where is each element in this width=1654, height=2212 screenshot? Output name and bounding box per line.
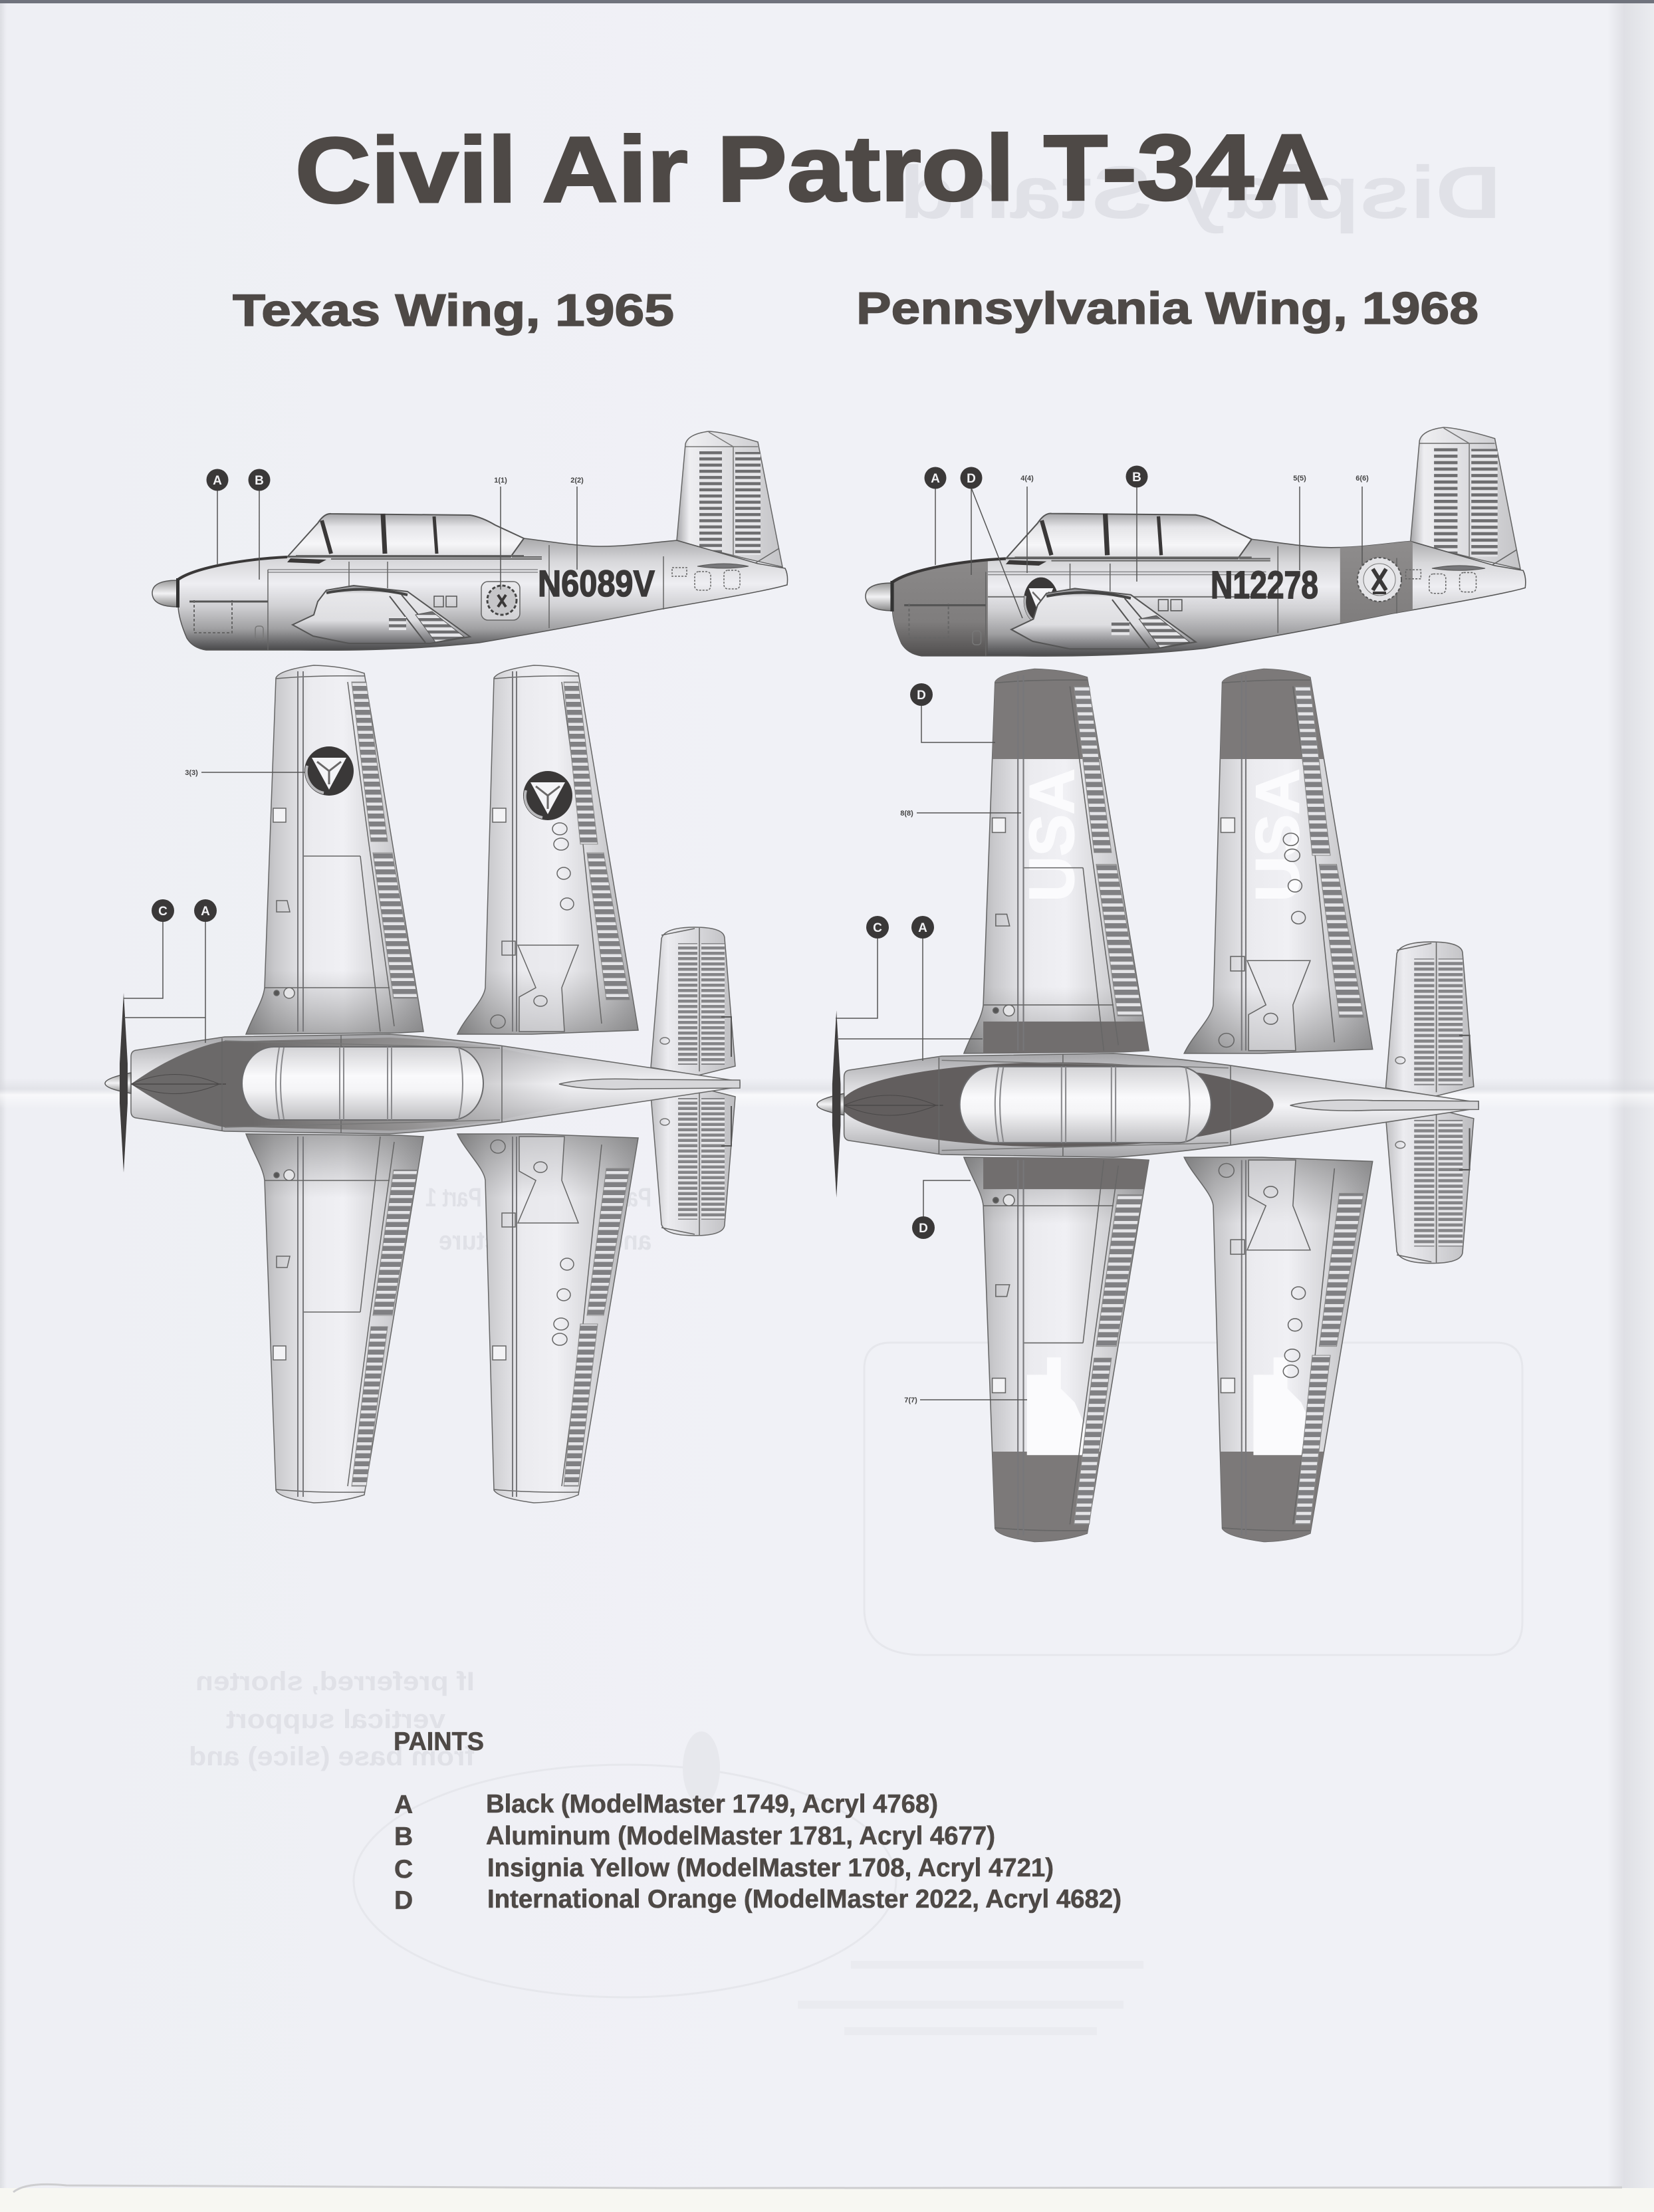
decal label 8(8): 8(8) (900, 810, 913, 818)
badge A: A (213, 474, 222, 488)
paint B: B (394, 1823, 413, 1851)
orange wing bands, lower (983, 1158, 1324, 1542)
badge A: A (931, 472, 940, 486)
badge C (866, 916, 889, 939)
squadron emblem panel (481, 582, 520, 620)
white lettering, lower wings (1027, 1357, 1316, 1455)
ghost show-through from reverse page: and cure structure (439, 1226, 651, 1256)
ghost show-through from reverse page: If preferred, shorten (195, 1667, 475, 1696)
paint A: Black (ModelMaster 1749, Acryl 4768) (486, 1790, 938, 1819)
CAP wing emblem, upper surface (304, 746, 354, 796)
decal label 6(6): 6(6) (1356, 475, 1369, 483)
decal label 1(1): 1(1) (494, 477, 507, 485)
decal label 5(5): 5(5) (1293, 475, 1306, 483)
heading: Pennsylvania Wing: Pennsylvania Wing, 1968 (856, 283, 1478, 334)
badge A (911, 916, 934, 939)
ghost show-through from reverse page: vertical support (226, 1705, 445, 1734)
badge D upper: D (917, 689, 926, 703)
badge A (206, 469, 229, 491)
ghost show-through from reverse page: Paint chamber to Part 1 (425, 1183, 651, 1212)
badge C: C (873, 921, 882, 935)
orange wing bands, upper (983, 669, 1324, 1053)
registration N12278: N12278 (1211, 564, 1318, 607)
badge D upper (910, 683, 933, 706)
paint B: Aluminum (ModelMaster 1781, Acryl 4677) (486, 1822, 995, 1850)
badge B (1126, 465, 1147, 488)
plan view: Pennsylvania Wing aircraft (817, 668, 1478, 1543)
grey fade around canopy (253, 1038, 572, 1131)
badge B (249, 469, 270, 491)
badge D lower: D (919, 1222, 928, 1236)
side view: Pennsylvania Wing aircraft (866, 427, 1526, 661)
paint D: D (394, 1886, 413, 1915)
decal label 2(2): 2(2) (570, 477, 584, 485)
CAP wing emblem, underside (523, 771, 572, 820)
ghost show-through from reverse page: from base (slice) and (189, 1742, 475, 1771)
heading: Texas Wing: Texas Wing, 1965 (233, 285, 674, 336)
legend heading: PAINTS (394, 1727, 484, 1756)
badge C (152, 899, 174, 922)
registration N6089V: N6089V (538, 562, 655, 604)
badge B: B (1132, 471, 1141, 485)
badge C: C (158, 905, 168, 919)
decal label 4(4): 4(4) (1020, 475, 1034, 483)
paints legend (394, 1727, 1122, 1915)
white USA on underside wing: USA (1244, 769, 1312, 902)
decal label 3(3): 3(3) (185, 769, 198, 777)
wing emblem on fuselage (1024, 578, 1058, 625)
paint C: Insignia Yellow (ModelMaster 1708, Acryl 4721) (487, 1854, 1054, 1882)
badge A (924, 467, 947, 489)
plan view: Texas Wing aircraft (105, 665, 740, 1503)
badge A (194, 899, 217, 922)
white USA on upper wing: USA (1017, 769, 1088, 902)
title: Civil Air Patrol T-34A (295, 114, 1330, 223)
callouts: Pennsylvania plan view (836, 683, 1027, 1404)
badge D: D (967, 472, 976, 486)
callouts: Texas side view (206, 469, 584, 590)
black upper fuselage ellipse (841, 1062, 1274, 1147)
badge A: A (201, 905, 210, 919)
ghost show-through from reverse page (189, 151, 1522, 2035)
paint C: C (394, 1855, 413, 1884)
callouts: Texas plan view (124, 769, 305, 1043)
orange cowl and tail band (892, 541, 1413, 651)
badge A: A (918, 921, 927, 935)
tail shield emblem (1358, 558, 1401, 602)
side view: Texas Wing aircraft (152, 431, 788, 650)
black anti-glare panel (131, 1041, 253, 1127)
ghost show-through from reverse page: Display Stand (899, 151, 1501, 234)
callouts: Pennsylvania side view (924, 465, 1369, 618)
paint A: A (394, 1791, 413, 1819)
badge D lower (912, 1216, 935, 1239)
decal label 7(7): 7(7) (904, 1396, 917, 1404)
badge D (960, 467, 983, 489)
paint D: International Orange (ModelMaster 2022, Acryl 4682) (487, 1885, 1122, 1914)
badge B: B (255, 474, 264, 488)
